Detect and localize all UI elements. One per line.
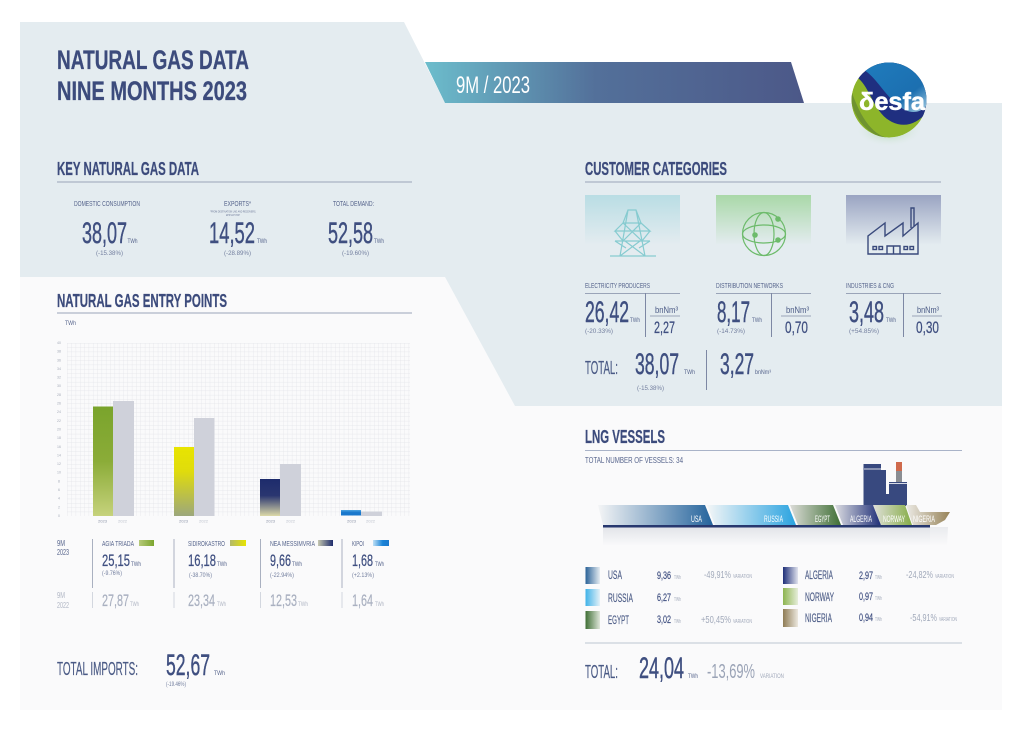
panel: lower light background: [20, 277, 1002, 710]
row labels: 9M 2022: 2022: [57, 601, 69, 610]
title: [57, 45, 249, 106]
customer total: [585, 348, 772, 392]
category: electricity producers: ELECTRICITY PRODUCERS: [585, 283, 650, 290]
icon: globe network: [716, 195, 811, 256]
bars: sidirokastro: [174, 418, 214, 524]
bar chart: 20: [57, 428, 61, 432]
bar chart: 22: [57, 419, 61, 423]
customer total: 3,27: [720, 348, 754, 381]
category: industries and cng: [846, 283, 942, 337]
hull segment: egypt: EGYPT: [815, 514, 830, 524]
total imports: [57, 649, 225, 688]
category: electricity producers: bnNm³: [655, 305, 678, 316]
stat: exports: *FROM DESTINATION LNG AND RECEIVERS,: [210, 210, 256, 214]
stat: domestic consumption: DOMESTIC CONSUMPTION: [74, 201, 140, 208]
panel: upper blue background: [20, 22, 1002, 406]
chart unit: TWh: [65, 320, 76, 327]
entry point: agia triada: TWh: [130, 602, 139, 608]
total imports: 52,67: [166, 649, 210, 682]
entry point: nea messimvria: [260, 539, 333, 610]
bar chart: 28: [57, 393, 61, 397]
legend: egypt: +50,45%: [701, 615, 731, 626]
bar chart: 14: [57, 453, 61, 457]
bars: kipoi: 2022: [366, 518, 376, 524]
stat: total demand: [328, 201, 384, 257]
legend: usa: -49,91%: [704, 570, 731, 581]
entry point: sidirokastro: 23,34: [188, 591, 215, 610]
bar chart: 12: [57, 462, 61, 466]
stat: exports: ENTRY-EXIT POINT: [226, 213, 240, 217]
heading: key natural gas data: KEY NATURAL GAS DATA: [57, 159, 199, 179]
hull segment: egypt: [790, 505, 841, 525]
hull segment: nigeria: NIGERIA: [913, 514, 935, 524]
entry point: nea messimvria: 12,53: [270, 591, 297, 610]
category: distribution networks: TWh: [752, 317, 762, 324]
total imports: TOTAL IMPORTS:: [57, 659, 138, 679]
hull segment: algeria: [835, 505, 881, 525]
customer total: 38,07: [635, 348, 679, 381]
bar chart: 10: [57, 471, 61, 475]
row labels: 9M 2023: [57, 539, 69, 557]
hull segment: algeria: ALGERIA: [850, 514, 872, 524]
legend: nigeria: -54,91%: [910, 613, 937, 624]
hull segment: russia: RUSSIA: [764, 514, 783, 524]
entry point: nea messimvria: (-22.94%): [270, 572, 294, 579]
total imports: (-19.46%): [166, 681, 186, 688]
hull segment: russia: [707, 505, 796, 525]
stat: domestic consumption: [74, 201, 140, 257]
ship illustration: [598, 462, 950, 546]
bars: sidirokastro: 2023: [179, 518, 189, 524]
entry point: kipoi: TWh: [375, 561, 384, 568]
lng total: TOTAL:: [585, 662, 618, 682]
bar chart: 24: [57, 410, 61, 414]
bar chart: 30: [57, 384, 61, 388]
category: electricity producers: TWh: [630, 317, 640, 324]
legend: algeria: -24,82%: [906, 570, 933, 581]
category: industries and cng: INDUSTRIES & CNG: [846, 283, 894, 290]
entry point: nea messimvria: 9,66: [270, 551, 291, 570]
bars: agia triada: 2023: [98, 518, 108, 524]
stat: total demand: 52,58: [328, 217, 373, 250]
legend: egypt: EGYPT: [608, 613, 629, 627]
legend: algeria: [783, 567, 954, 584]
hull segment: usa: USA: [691, 514, 702, 524]
category: distribution networks: bnNm³: [786, 305, 809, 316]
stat: domestic consumption: (-15.38%): [96, 250, 123, 257]
hull segment: norway: [873, 505, 912, 525]
entry point: kipoi: 1,64: [352, 591, 373, 610]
entry point: agia triada: AGIA TRIADA: [102, 541, 134, 548]
entry point: agia triada: (-9.76%): [102, 570, 122, 577]
legend: russia: [586, 589, 681, 606]
hull segment: usa: [598, 505, 713, 525]
category: distribution networks: [716, 283, 811, 337]
legend: norway: NORWAY: [805, 590, 834, 604]
entry point: nea messimvria: NEA MESSIMVRIA: [270, 541, 315, 548]
panel: lng vessels: [585, 427, 962, 685]
category: industries and cng: TWh: [886, 317, 896, 324]
stat: exports: TWh: [257, 238, 267, 245]
legend: algeria: 2,97: [859, 570, 873, 582]
legend: norway: TWh: [875, 596, 882, 602]
legend: russia: TWh: [674, 597, 681, 603]
panel: natural gas entry points: [57, 291, 412, 688]
title: NATURAL GAS DATA: [57, 45, 249, 75]
legend: russia: 6,27: [657, 592, 671, 604]
entry point: sidirokastro: TWh: [217, 561, 227, 568]
hull segment: norway: NORWAY: [883, 514, 905, 524]
entry point: sidirokastro: SIDIROKASTRO: [188, 541, 225, 548]
legend: usa: [586, 567, 752, 584]
stat: exports: (-28.89%): [224, 250, 251, 257]
legend: egypt: 3,02: [657, 614, 671, 626]
bar chart: 38: [57, 350, 61, 354]
legend: nigeria: 0,94: [859, 612, 873, 624]
panel: customer categories: [585, 159, 942, 392]
legend: usa: USA: [608, 568, 622, 582]
lng total: TWh: [688, 673, 698, 680]
icon: factory: [846, 195, 941, 254]
row labels: 9M 2022: 9M: [57, 591, 65, 600]
bars: agia triada: [93, 401, 134, 524]
row labels: 9M 2022: [57, 591, 69, 610]
entry point: agia triada: 25,15: [102, 551, 130, 570]
bars: nea messimvria: 2023: [266, 518, 276, 524]
entry point: nea messimvria: TWh: [292, 561, 302, 568]
bar chart: 34: [57, 367, 61, 371]
customer total: (-15.38%): [637, 385, 664, 392]
customer total: bnNm³: [755, 369, 772, 376]
bars: kipoi: 2023: [347, 518, 357, 524]
legend: nigeria: VARIATION: [939, 617, 957, 623]
legend: usa: TWh: [674, 575, 681, 581]
entry point: kipoi: TWh: [375, 602, 384, 608]
heading: natural gas entry points: NATURAL GAS ENTRY POINTS: [57, 291, 227, 311]
stat: exports: 14,52: [209, 217, 255, 250]
period banner: 9M / 2023: [456, 72, 530, 99]
bar chart: 2: [58, 505, 60, 509]
legend: russia: RUSSIA: [608, 591, 633, 605]
entry point: kipoi: [342, 539, 389, 610]
heading: lng vessels: LNG VESSELS: [585, 427, 665, 447]
stat: exports: EXPORTS*: [224, 201, 251, 208]
category: industries and cng: 3,48: [849, 296, 884, 329]
stat: total demand: TWh: [374, 238, 384, 245]
entry point: agia triada: TWh: [131, 561, 141, 568]
row labels: 9M 2023: 2023: [57, 548, 69, 557]
category: distribution networks: 8,17: [717, 296, 750, 329]
legend: egypt: TWh: [674, 619, 681, 625]
stat: exports: [209, 201, 267, 257]
vessels count: TOTAL NUMBER OF VESSELS: 34: [585, 456, 683, 465]
category: electricity producers: 2,27: [654, 318, 675, 337]
ship superstructure: [864, 462, 907, 506]
category: electricity producers: 26,42: [585, 296, 629, 329]
legend: egypt: [586, 611, 752, 629]
hull segment: nigeria: [906, 505, 950, 525]
bar chart: 18: [57, 436, 61, 440]
entry point: kipoi: KIPOI: [352, 541, 364, 548]
stat: domestic consumption: 38,07: [82, 217, 127, 250]
lng total: VARIATION: [760, 673, 784, 680]
category: industries and cng: bnNm³: [917, 305, 939, 316]
period banner: [425, 62, 804, 103]
heading: customer categories: CUSTOMER CATEGORIES: [585, 159, 727, 179]
category: industries and cng: 0,30: [916, 318, 939, 337]
lng total: 24,04: [639, 652, 684, 685]
total imports: TWh: [214, 670, 225, 677]
bars: sidirokastro: 2022: [199, 518, 209, 524]
category: electricity producers: (-20.33%): [585, 328, 613, 335]
bar chart: 36: [57, 358, 61, 362]
legend: algeria: VARIATION: [935, 574, 954, 580]
stat: total demand: TOTAL DEMAND:: [333, 201, 374, 208]
bar chart: 8: [58, 479, 60, 483]
customer total: TWh: [684, 369, 695, 376]
lng total: [585, 652, 784, 685]
stat: total demand: (-19.60%): [342, 250, 369, 257]
legend: nigeria: [783, 609, 957, 627]
legend: usa: 9,36: [657, 570, 671, 582]
stat: domestic consumption: TWh: [128, 238, 138, 245]
legend: algeria: ALGERIA: [805, 568, 833, 582]
entry point: agia triada: [92, 539, 154, 610]
bars: kipoi: [341, 510, 382, 524]
legend: norway: [783, 588, 882, 605]
bars: agia triada: 2022: [118, 518, 128, 524]
bar chart: 32: [57, 376, 61, 380]
legend: algeria: TWh: [875, 575, 882, 581]
lng total: -13,69%: [707, 661, 755, 683]
legend: nigeria: TWh: [875, 617, 882, 623]
icon: desfa logo: δesfa: [859, 88, 926, 116]
entry point: agia triada: 27,87: [102, 591, 129, 610]
bar chart: 40: [57, 341, 61, 345]
title: NINE MONTHS 2023: [57, 76, 247, 106]
legend: egypt: VARIATION: [733, 619, 752, 625]
category: industries and cng: (+54.85%): [849, 328, 879, 335]
bars: nea messimvria: 2022: [286, 518, 296, 524]
bar chart: [57, 341, 410, 524]
legend: usa: VARIATION: [733, 574, 752, 580]
bar chart: 6: [58, 488, 60, 492]
legend: norway: 0,97: [859, 591, 873, 603]
icon: electricity pylon: [585, 195, 680, 256]
entry point: kipoi: 1,68: [352, 551, 373, 570]
category: distribution networks: 0,70: [785, 318, 808, 337]
category: distribution networks: (-14.73%): [717, 328, 745, 335]
bar chart: 4: [58, 497, 60, 501]
customer total: TOTAL:: [585, 358, 618, 378]
panel: key natural gas data: [57, 159, 412, 257]
entry point: nea messimvria: TWh: [298, 602, 308, 608]
entry point: sidirokastro: [174, 539, 246, 610]
entry point: sidirokastro: 16,18: [188, 551, 216, 570]
entry point: kipoi: (+2.13%): [352, 572, 374, 579]
entry point: sidirokastro: TWh: [217, 602, 226, 608]
icon: desfa logo: [851, 60, 927, 147]
bar chart: 26: [57, 402, 61, 406]
row labels: 9M 2023: 9M: [57, 539, 65, 548]
bar chart: 0: [58, 514, 60, 518]
category: distribution networks: DISTRIBUTION NETWORKS: [716, 283, 783, 290]
category: electricity producers: [585, 283, 680, 337]
bars: nea messimvria: [260, 464, 301, 524]
entry point: sidirokastro: (-38.70%): [189, 572, 212, 579]
legend: nigeria: NIGERIA: [805, 611, 832, 625]
bar chart: 16: [57, 445, 61, 449]
